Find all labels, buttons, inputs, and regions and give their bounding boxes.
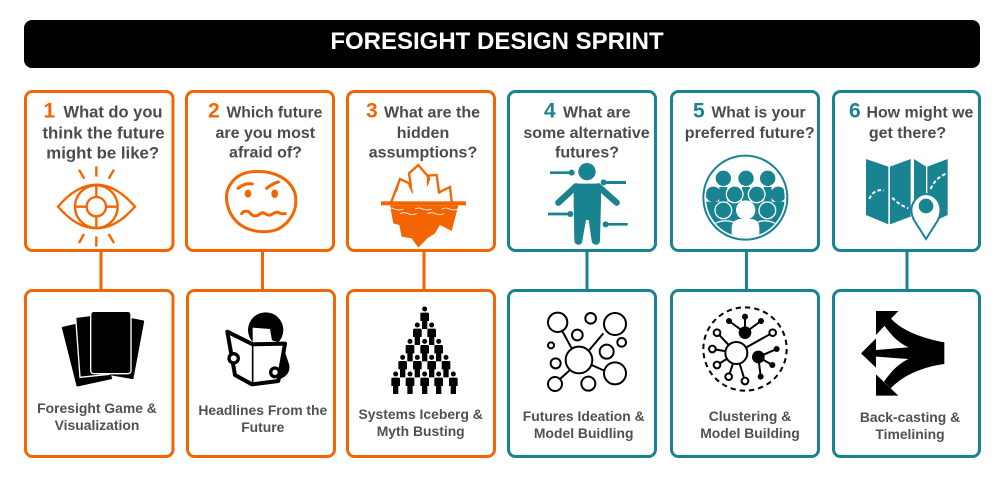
label <box>700 408 800 441</box>
question 6 text: How might we <box>866 104 973 122</box>
question 5 text: preferred future? <box>685 125 815 142</box>
connector 6 <box>906 250 908 290</box>
icon: person with pointers <box>548 163 628 245</box>
label: Foresight Game & <box>37 400 157 416</box>
label <box>359 406 483 439</box>
question 4 text <box>523 100 650 162</box>
question 6 text: get there? <box>869 125 946 142</box>
label: Headlines From the <box>198 402 328 418</box>
panel: question 6 <box>834 92 980 250</box>
label: Future <box>241 419 285 435</box>
panel: question 4 <box>508 92 656 250</box>
label: Systems Iceberg & <box>359 406 483 422</box>
question 5 text: 5 <box>693 100 705 122</box>
panel: question 2 <box>186 92 334 250</box>
question 6 text <box>849 100 973 142</box>
question 3 text: What are the <box>384 104 480 122</box>
question 4 text: 4 <box>544 100 556 122</box>
icon: idea network <box>548 313 626 391</box>
icon: map with pin <box>866 159 948 239</box>
panel: question 3 <box>348 92 494 250</box>
icon: diverging arrows <box>861 311 944 396</box>
icon: eye <box>58 166 135 247</box>
label: Timelining <box>875 426 945 442</box>
question 5 text <box>685 100 815 142</box>
question 3 text: assumptions? <box>369 144 477 162</box>
question 2 text: Which future <box>226 104 323 122</box>
icon: iceberg <box>381 165 466 248</box>
panel: activity 6 <box>834 290 980 456</box>
question 2 text: 2 <box>208 100 220 122</box>
icon: clusters <box>703 307 787 391</box>
question 1 text <box>42 100 165 162</box>
icon: worried face <box>227 171 296 232</box>
icon: person reading newspaper <box>227 312 289 384</box>
icon: cards <box>63 311 143 386</box>
label <box>37 400 157 433</box>
question 3 text <box>366 100 480 162</box>
connector 3 <box>422 250 426 290</box>
connector 2 <box>261 250 264 290</box>
question 4 text: What are <box>563 104 631 122</box>
title banner: FORESIGHT DESIGN SPRINT <box>330 28 664 55</box>
connector 5 <box>745 250 748 290</box>
label <box>860 409 960 442</box>
panel: question 5 <box>672 92 818 250</box>
label: Futures Ideation & <box>523 408 645 424</box>
panel: activity 3 <box>348 290 494 456</box>
title banner <box>24 20 980 68</box>
question 4 text: some alternative <box>523 125 650 142</box>
panel: activity 5 <box>672 290 818 456</box>
label: Visualization <box>55 417 139 433</box>
question 6 text: 6 <box>849 100 861 122</box>
question 3 text: hidden <box>397 125 449 142</box>
question 3 text: 3 <box>366 100 378 122</box>
question 2 text <box>208 100 323 162</box>
panel: activity 2 <box>188 290 334 456</box>
label: Model Building <box>700 425 800 441</box>
icon: crowd in circle <box>703 156 790 242</box>
panel: question 1 <box>26 92 173 250</box>
icon: pyramid of people <box>391 306 458 394</box>
question 1 text: 1 <box>44 100 56 122</box>
connector 4 <box>586 250 588 290</box>
label <box>198 402 328 435</box>
panel: activity 4 <box>508 290 656 456</box>
connector 1 <box>100 250 102 290</box>
question 1 text: might be like? <box>46 144 159 162</box>
question 2 text: are you most <box>216 125 316 142</box>
label: Model Buidling <box>534 425 633 441</box>
question 1 text: What do you <box>64 104 162 122</box>
question 2 text: afraid of? <box>229 144 302 162</box>
question 5 text: What is your <box>712 104 806 122</box>
label: Myth Busting <box>377 423 465 439</box>
label: Clustering & <box>709 408 791 424</box>
label: Back-casting & <box>860 409 960 425</box>
question 1 text: think the future <box>42 124 165 142</box>
question 4 text: futures? <box>555 144 619 162</box>
label <box>523 408 645 441</box>
panel: activity 1 <box>26 290 173 456</box>
